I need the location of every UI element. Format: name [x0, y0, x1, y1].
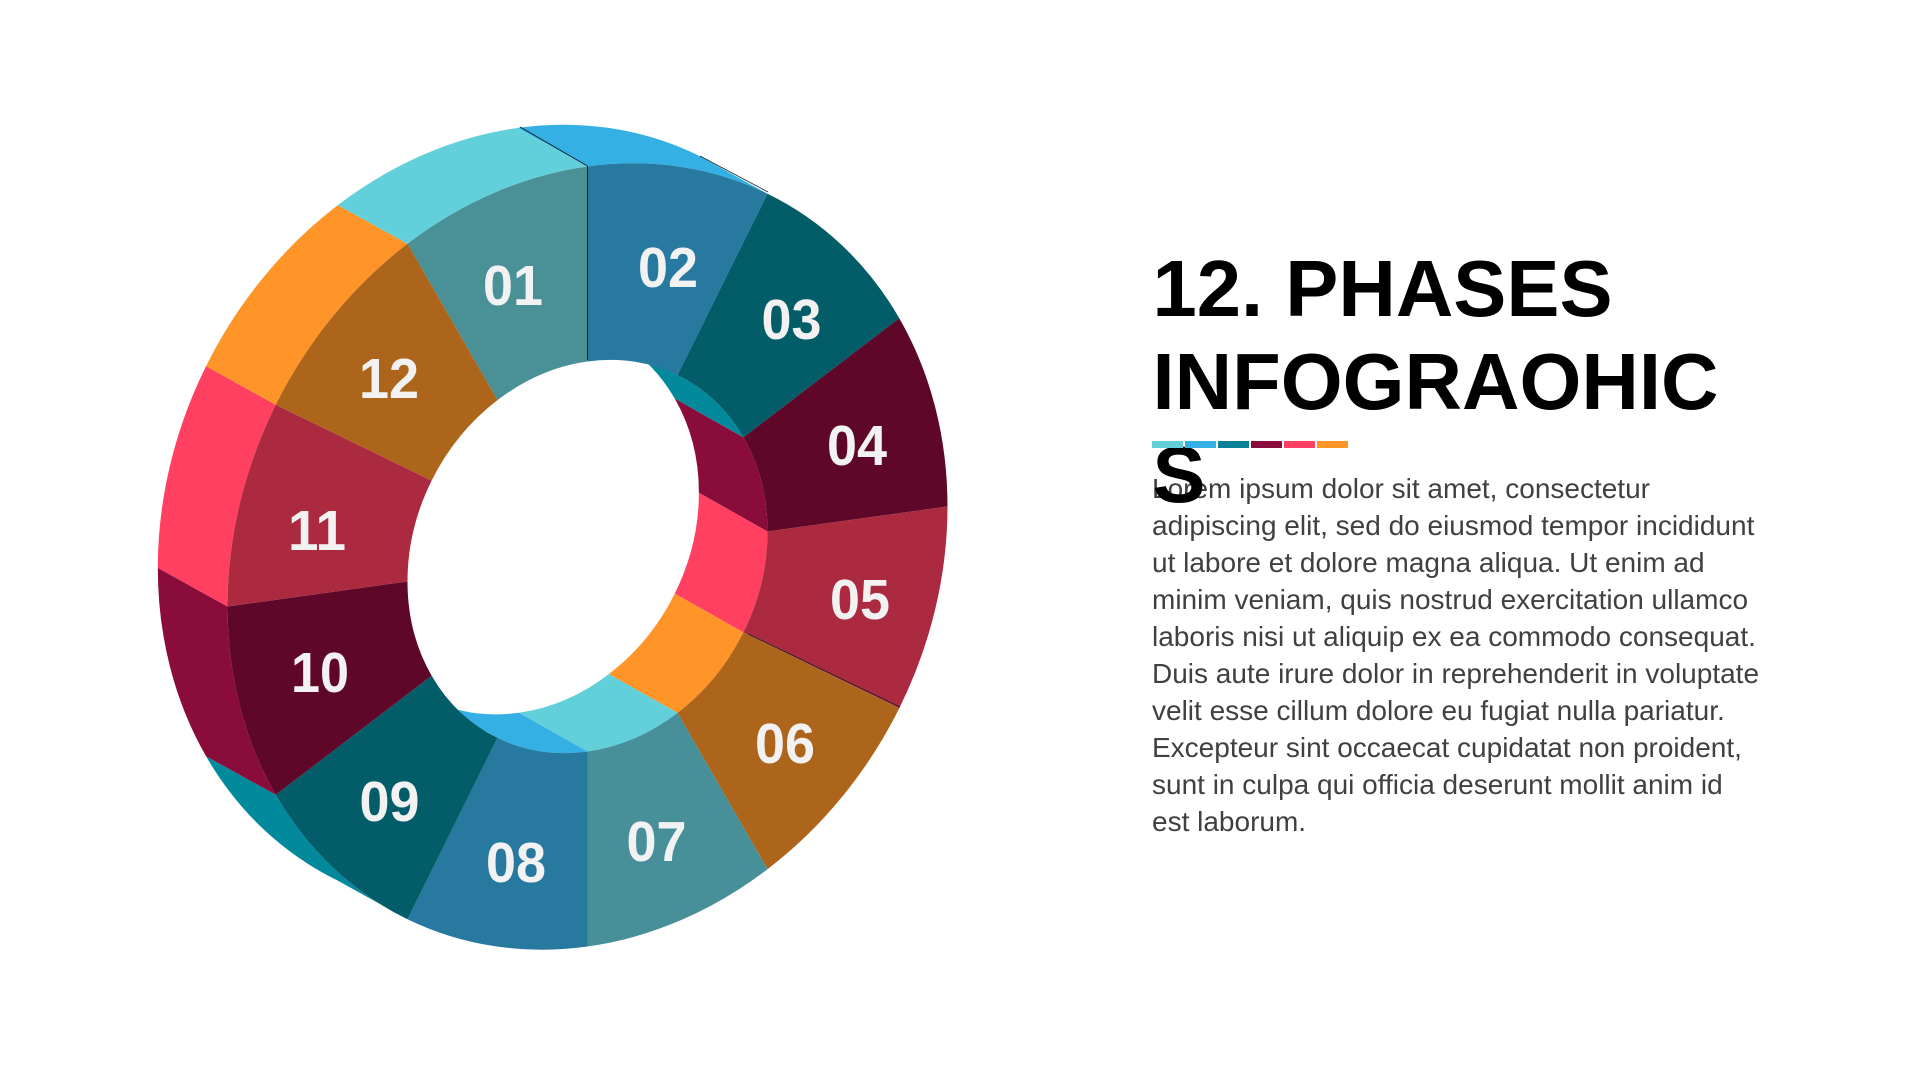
segment 04	[743, 312, 948, 535]
segment 06: 06	[755, 712, 815, 776]
segment 12	[276, 231, 498, 502]
inner wall 08	[429, 677, 588, 774]
inner wall 04	[675, 386, 768, 544]
segment 11: 11	[288, 499, 346, 563]
title: 12. PHASES	[1152, 244, 1613, 333]
segment 08	[408, 725, 588, 972]
inner walls of the hole	[429, 314, 768, 774]
segment 01: 01	[483, 254, 543, 318]
body text: ut labore et dolore magna aliqua. Ut enim ad	[1152, 547, 1705, 578]
outer walls of the ring	[158, 93, 768, 954]
segment 01	[408, 166, 588, 413]
segment 03: 03	[762, 288, 822, 352]
outer wall 10	[158, 552, 276, 811]
body text: sunt in culpa qui officia deserunt mollit anim id	[1152, 769, 1723, 800]
segment 06	[678, 611, 899, 882]
body text	[1152, 473, 1759, 837]
outer wall 02	[518, 93, 768, 228]
segment 02	[588, 141, 768, 388]
segment 05: 05	[830, 568, 890, 632]
title: INFOGRAOHIC	[1152, 337, 1718, 426]
inner wall 05	[675, 483, 768, 642]
segment 05	[743, 506, 948, 730]
segment 07: 07	[626, 810, 686, 874]
body text: Lorem ipsum dolor sit amet, consectetur	[1152, 473, 1650, 504]
segment 09	[276, 666, 498, 938]
inner wall 07	[519, 665, 678, 761]
body text: laboris nisi ut aliquip ex ea commodo consequat.	[1152, 621, 1756, 652]
title	[1152, 244, 1718, 519]
segment 10	[228, 578, 432, 802]
segment 11	[228, 383, 432, 606]
segment 08: 08	[486, 831, 546, 895]
segment 04: 04	[827, 414, 887, 478]
outer wall 12	[206, 195, 408, 414]
body text: minim veniam, quis nostrud exercitation ullamco	[1152, 584, 1748, 615]
segment 02: 02	[638, 236, 698, 300]
inner wall 03	[609, 318, 743, 456]
body text: est laborum.	[1152, 806, 1306, 837]
body text: velit esse cillum dolore eu fugiat nulla pariatur.	[1152, 695, 1725, 726]
segment 12: 12	[359, 347, 419, 411]
segment 10: 10	[291, 641, 349, 705]
body text: adipiscing elit, sed do eiusmod tempor incididunt	[1152, 510, 1754, 541]
body text: Duis aute irure dolor in reprehenderit in voluptate	[1152, 658, 1759, 689]
segment 07	[588, 700, 768, 946]
body text: Excepteur sint occaecat cupidatat non proident,	[1152, 732, 1742, 763]
colour bars accent	[1152, 441, 1348, 448]
outer wall 11	[158, 357, 276, 616]
outer wall 09	[206, 728, 408, 947]
title: S	[1152, 430, 1206, 519]
segment 03	[678, 175, 899, 446]
outer wall 01	[338, 118, 588, 253]
segment 09: 09	[360, 770, 420, 834]
inner wall 06	[609, 584, 743, 722]
